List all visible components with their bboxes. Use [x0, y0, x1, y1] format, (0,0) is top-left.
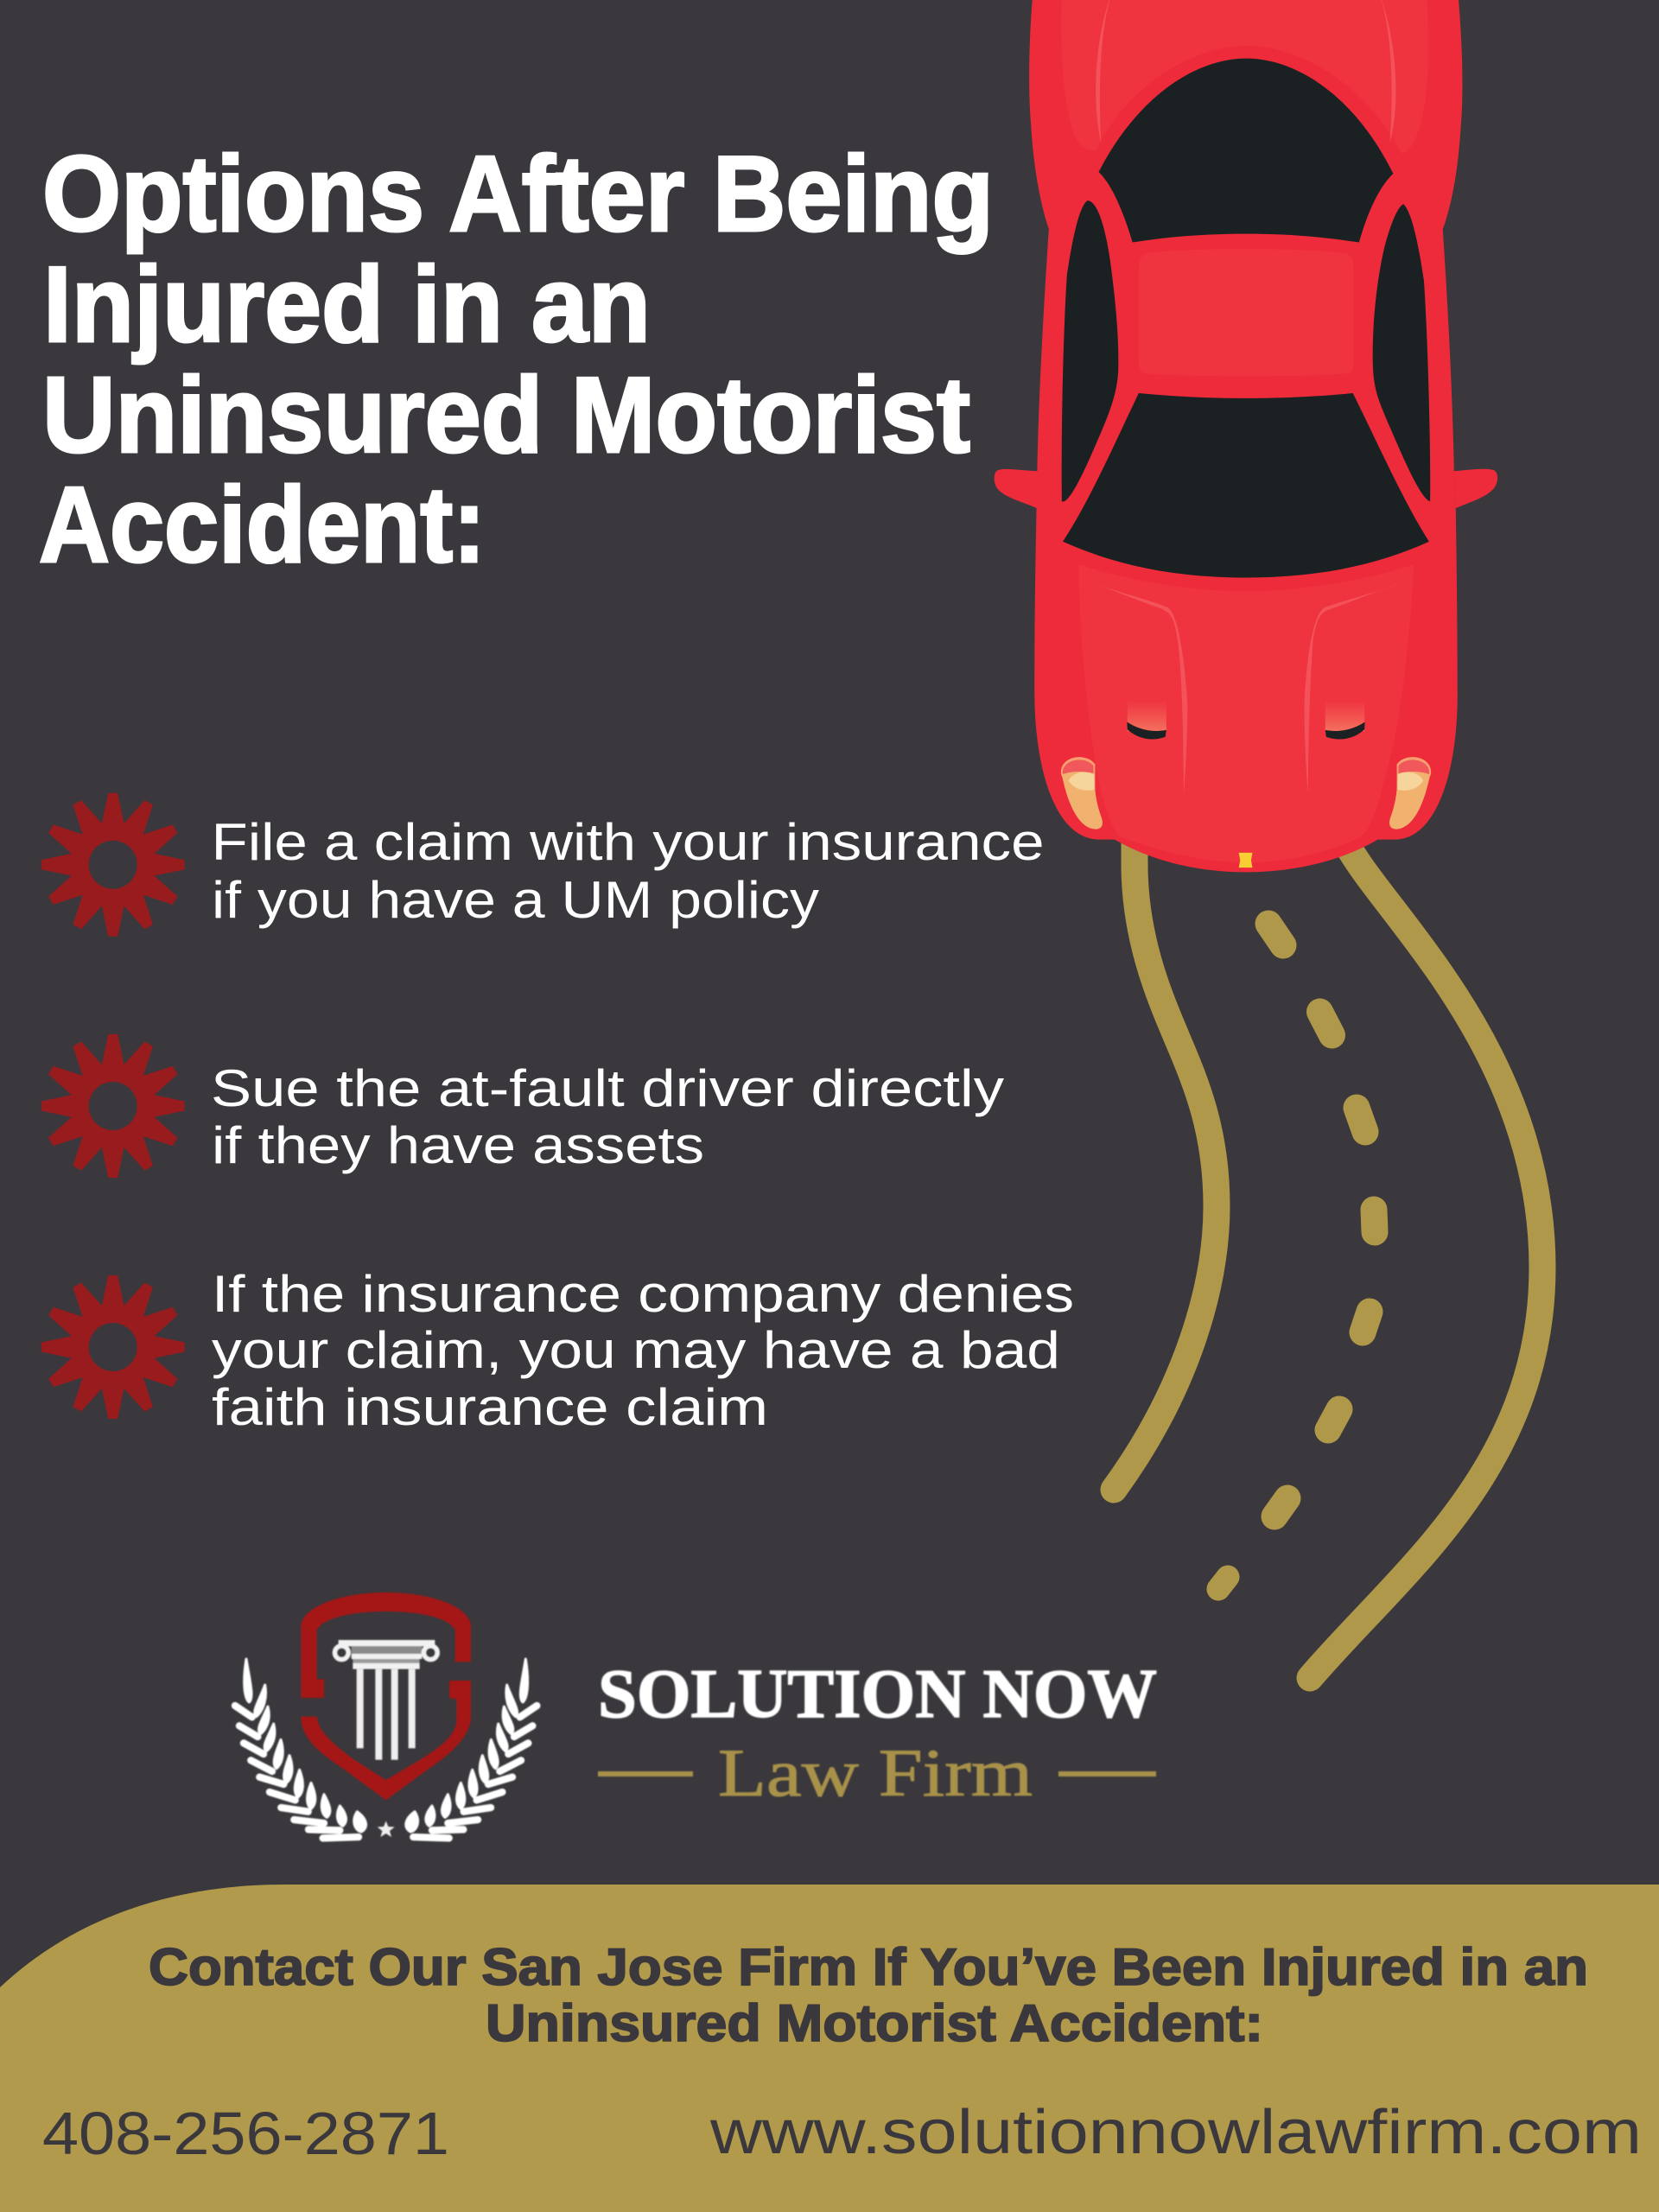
road left edge line: [1114, 821, 1217, 1490]
phone number: 408-256-2871: [42, 2100, 449, 2167]
rear deck panel: [1061, 0, 1428, 154]
laurel right: [406, 1659, 537, 1838]
title: [39, 135, 994, 585]
left side window: [1062, 200, 1118, 502]
star: [378, 1821, 395, 1837]
road illustration: [1114, 821, 1542, 1678]
red car, top view: [995, 0, 1497, 872]
right side window: [1373, 204, 1430, 501]
item text: Sue the at-fault driver directly: [211, 1059, 1004, 1117]
item text: faith insurance claim: [212, 1378, 768, 1436]
rear window: [1099, 59, 1393, 243]
icon: red gear: [41, 1275, 185, 1419]
title: Injured in an: [43, 245, 651, 365]
laurel left: [235, 1659, 366, 1838]
logo emblem: [235, 1592, 537, 1838]
list item 2: [41, 1034, 1004, 1178]
wordmark: SOLUTION NOW: [598, 1656, 1157, 1732]
shield upper: [301, 1592, 471, 1698]
wordmark subline: [598, 1735, 1156, 1810]
logo: Solution Now Law Firm: [235, 1592, 1157, 1838]
left headlight: [1062, 759, 1103, 830]
item text: your claim, you may have a bad: [212, 1321, 1060, 1379]
hood vents: [1127, 700, 1365, 740]
right headlight: [1389, 759, 1430, 830]
contact heading: Uninsured Motorist Accident:: [486, 1994, 1263, 2052]
footer contact panel: [0, 1885, 1659, 2212]
roof panel: [1139, 249, 1354, 376]
item text: [212, 1265, 1074, 1436]
road centre dashes: [1218, 924, 1375, 1589]
contact heading: Contact Our San Jose Firm If You’ve Been Injured in an: [149, 1938, 1588, 1996]
yellow badge: [1239, 853, 1252, 868]
icon: red gear: [41, 1034, 185, 1178]
shield lower: [301, 1681, 471, 1800]
hood panel: [1079, 564, 1414, 862]
right mirror: [1454, 469, 1497, 508]
title: Uninsured Motorist: [42, 356, 970, 475]
item text: File a claim with your insurance: [211, 813, 1044, 871]
windshield: [1063, 393, 1429, 578]
item text: if they have assets: [212, 1116, 704, 1174]
left mirror: [995, 469, 1038, 508]
item text: if you have a UM policy: [212, 871, 819, 929]
website: www.solutionnowlawfirm.com: [709, 2098, 1642, 2167]
road right edge line: [1310, 821, 1542, 1678]
list item 1: [41, 793, 1045, 937]
car body: [1029, 0, 1462, 872]
list item 3: [41, 1265, 1074, 1436]
wordmark subline: Law Firm: [718, 1735, 1033, 1810]
contact heading: [149, 1938, 1588, 2052]
item text: [211, 813, 1044, 929]
item text: [211, 1059, 1004, 1174]
title: Options After Being: [42, 135, 994, 254]
item text: If the insurance company denies: [212, 1265, 1074, 1323]
body highlight lines: [1089, 0, 1403, 794]
column: [334, 1640, 437, 1760]
title: Accident:: [39, 466, 486, 585]
icon: red gear: [41, 793, 185, 937]
gold footer background: [0, 1885, 1659, 2212]
